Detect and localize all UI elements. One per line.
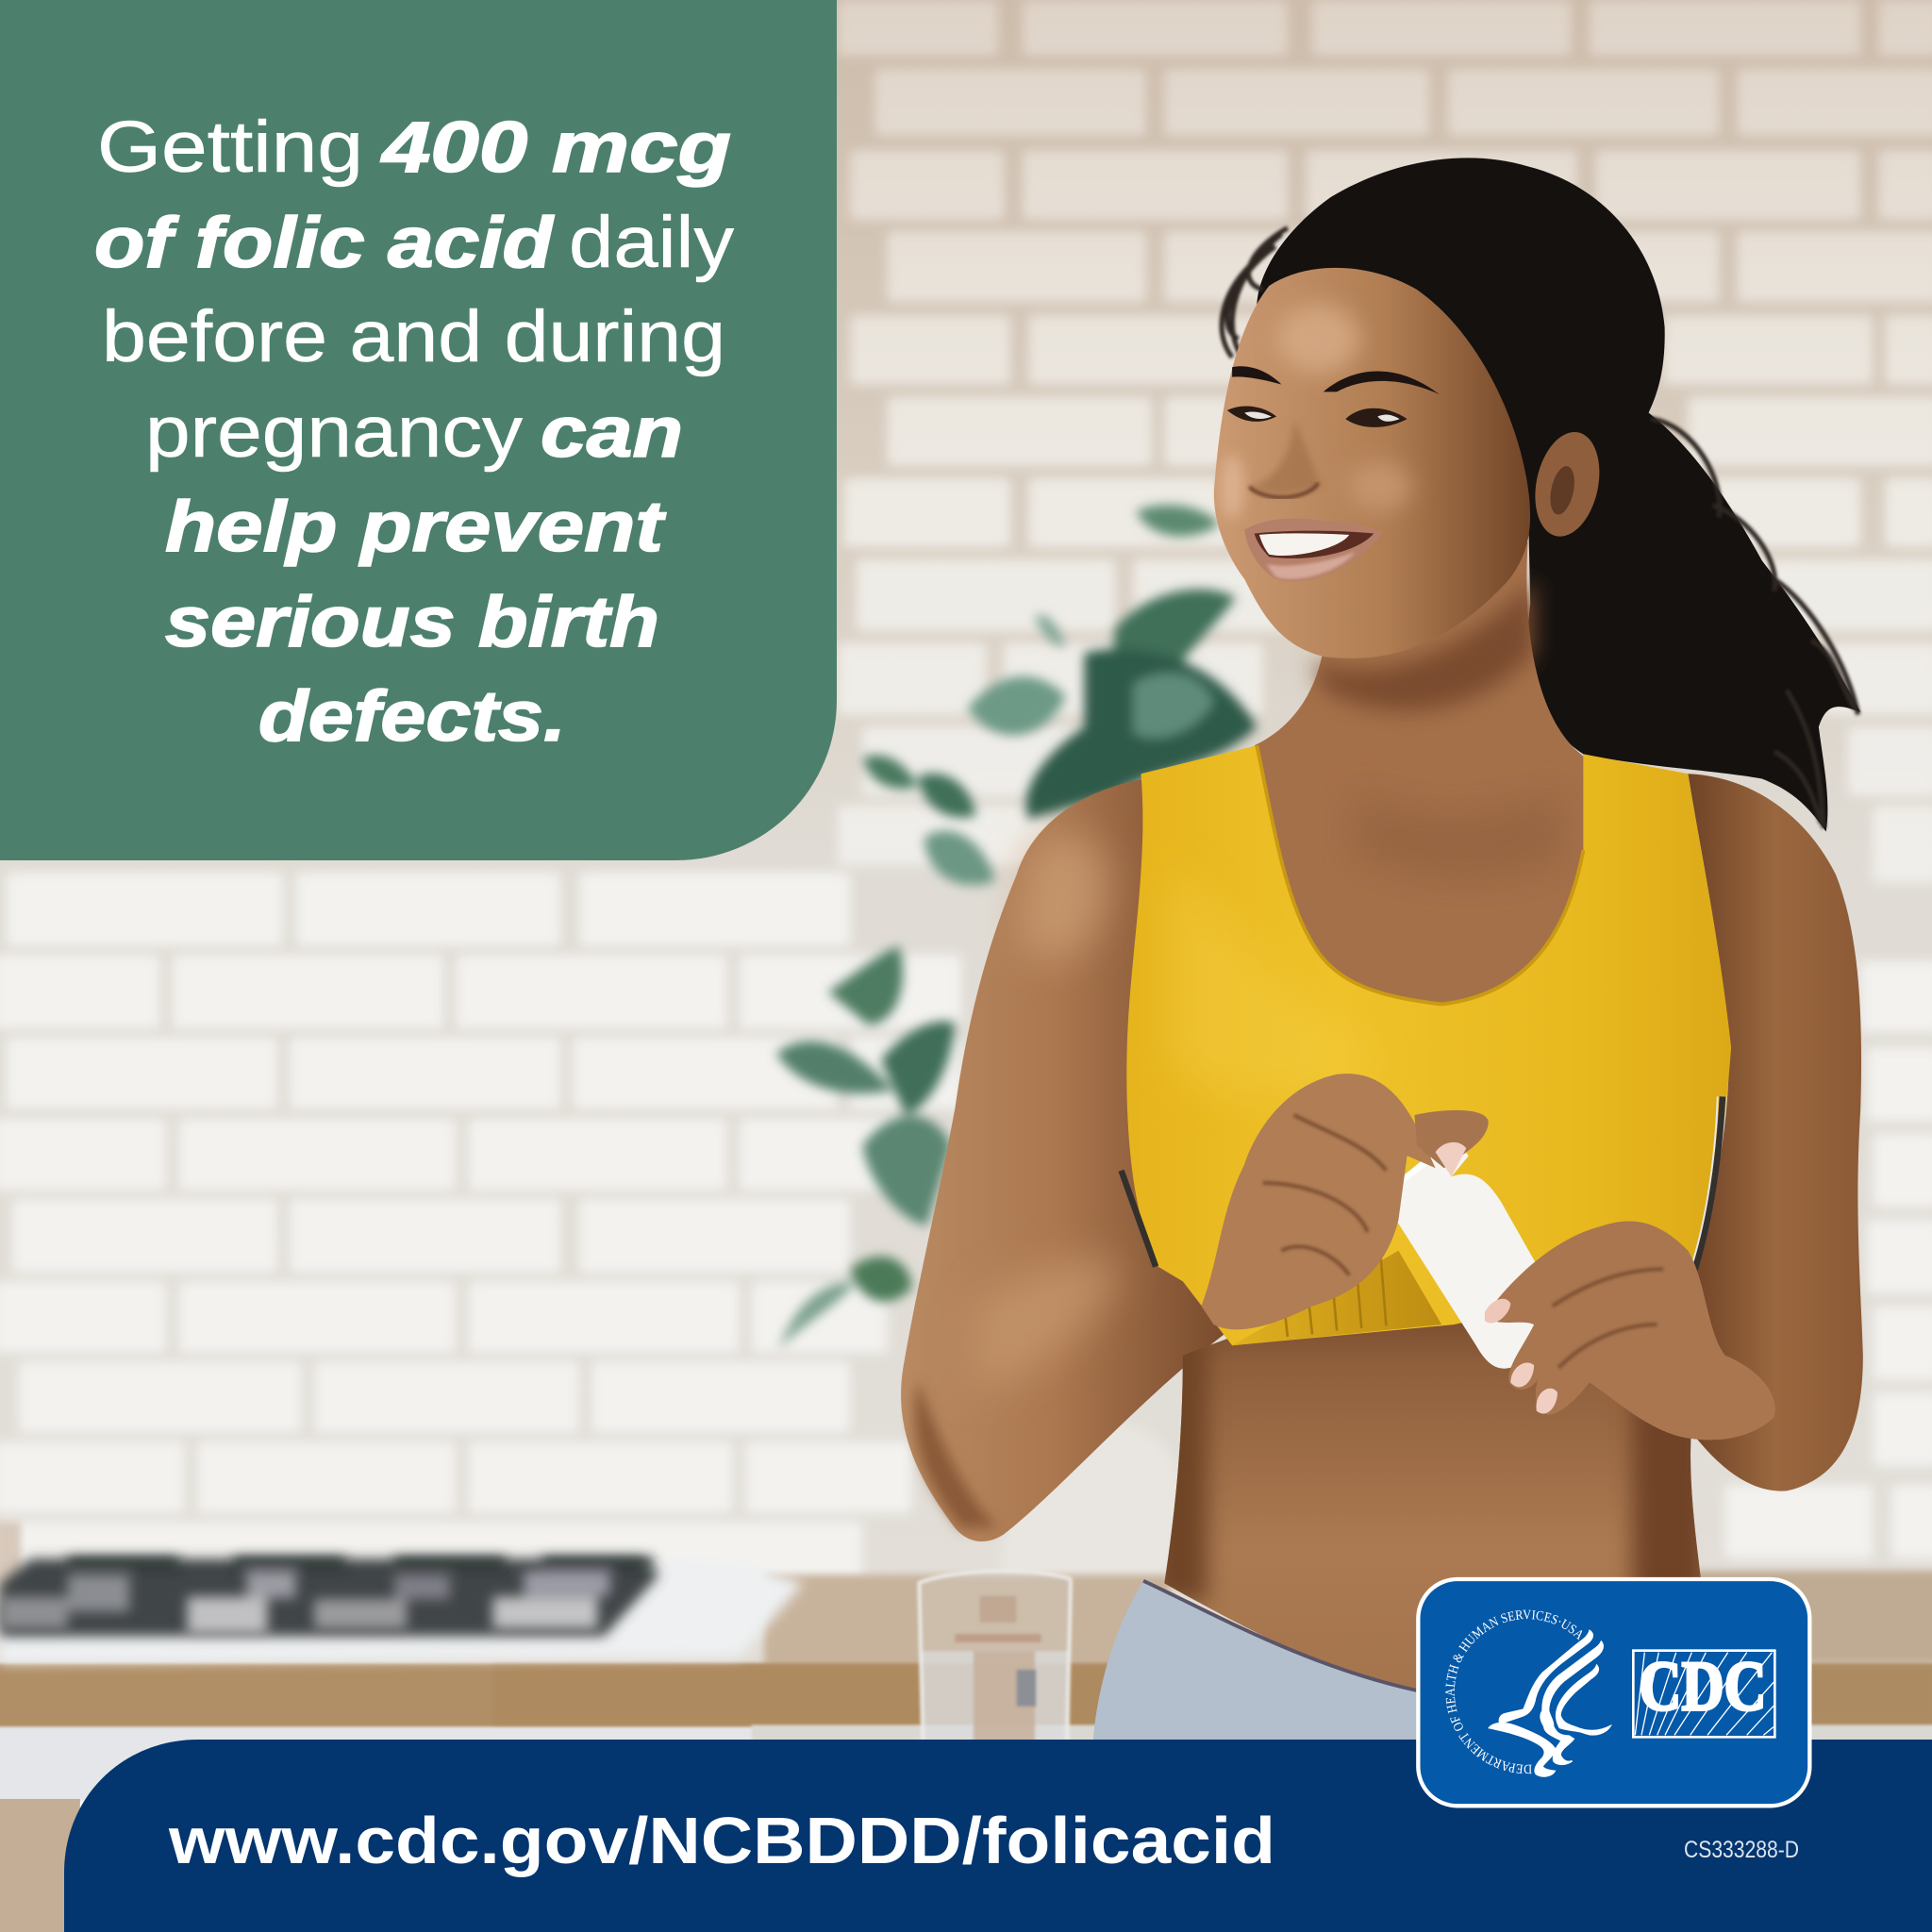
headline text block: daily — [569, 202, 735, 283]
right hand — [1485, 1221, 1775, 1440]
left arm — [901, 778, 1244, 1541]
headline text block: 400 mcg — [380, 108, 731, 188]
torso — [1164, 1323, 1701, 1689]
woman — [901, 158, 1863, 1743]
headline text block: Getting — [97, 107, 363, 188]
publication code: CS333288-D — [1684, 1837, 1799, 1863]
headline text block — [94, 107, 735, 757]
headline text block: pregnancy — [145, 391, 524, 473]
white supplement bottle — [1396, 1136, 1544, 1369]
HHS seal: DEPARTMENT OF HEALTH & HUMAN SERVICES·USA — [1445, 1609, 1583, 1774]
headline text block: serious birth — [165, 582, 659, 662]
headline text block: help prevent — [165, 487, 666, 567]
glass of water — [918, 1571, 1072, 1742]
hair and ponytail — [1222, 158, 1860, 832]
head and face — [1214, 268, 1608, 658]
light blue leggings — [1093, 1581, 1417, 1743]
neck and chest — [1255, 542, 1586, 1004]
green text panel — [0, 0, 837, 860]
kitchen counter and stove — [0, 1421, 1932, 1932]
right arm — [1688, 774, 1863, 1491]
potted plant leaves — [776, 505, 1257, 1349]
navy footer bar — [64, 1740, 1932, 1932]
headline text block: of folic acid — [94, 203, 555, 283]
headline text block: before and during — [102, 296, 725, 377]
HHS and CDC logo badge — [1416, 1577, 1811, 1807]
website url: www.cdc.gov/NCBDDD/folicacid — [168, 1804, 1275, 1877]
left hand — [1201, 1074, 1436, 1329]
headline text block: can — [541, 392, 683, 473]
yellow top — [1122, 745, 1731, 1345]
headline text block: defects. — [258, 676, 566, 757]
CDC logo box: CDC — [1639, 1647, 1767, 1725]
